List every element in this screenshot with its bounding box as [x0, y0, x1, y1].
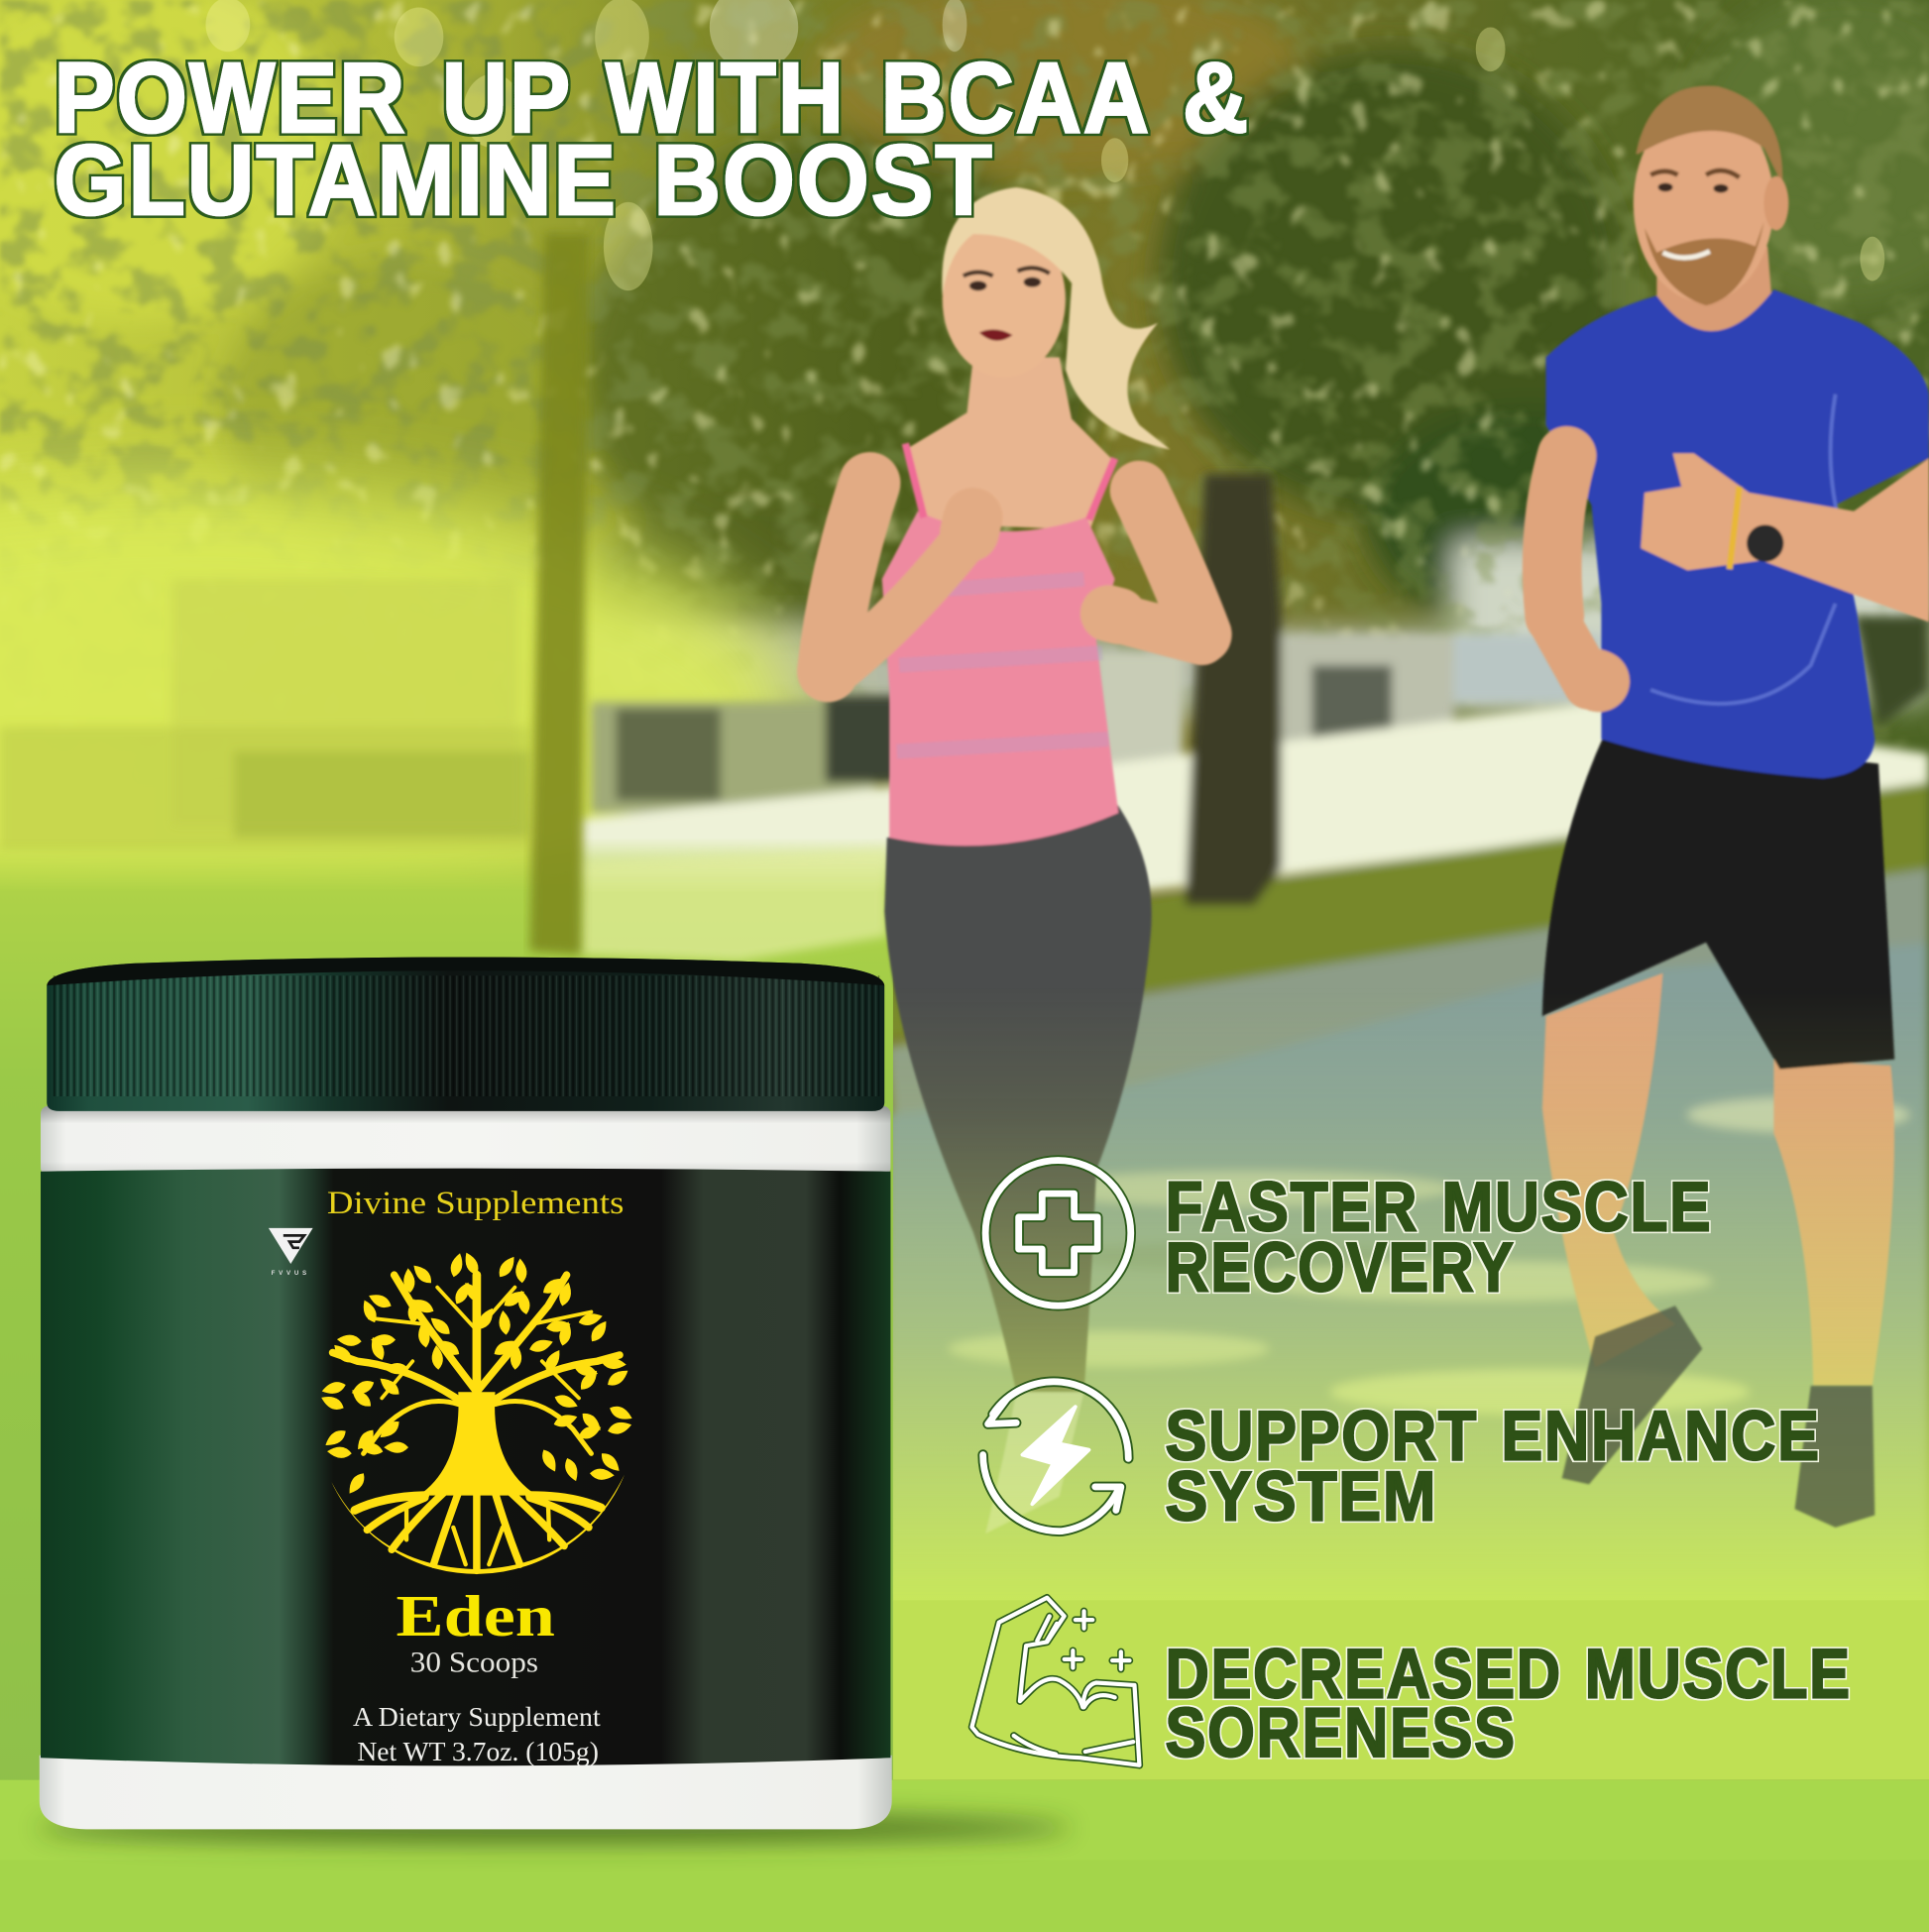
jar lower white rim	[40, 1756, 892, 1829]
title: POWER UP WITH BCAA &	[55, 43, 1250, 154]
neck and chest	[905, 357, 1115, 529]
man left arm	[1552, 456, 1599, 684]
benefit: decreased muscle soreness	[1166, 1635, 1852, 1772]
left tree trunk	[529, 234, 589, 955]
benefit: faster muscle recovery: RECOVERY	[1166, 1228, 1515, 1307]
man runner	[1542, 86, 1929, 1386]
benefit: faster muscle recovery	[1166, 1168, 1712, 1307]
icon: flexed muscle arm	[971, 1598, 1139, 1765]
man shorts	[1542, 733, 1894, 1070]
woman arms	[828, 483, 1202, 677]
woman head	[943, 222, 1066, 377]
benefit: support enhance system: SUPPORT ENHANCE	[1166, 1398, 1821, 1476]
pink tank top	[882, 511, 1118, 846]
jar upper white band	[41, 1106, 890, 1176]
brand name: Divine Supplements	[327, 1185, 624, 1220]
man head	[1634, 105, 1773, 301]
neck	[1656, 247, 1773, 370]
product name: Eden	[397, 1583, 555, 1648]
benefit: decreased muscle soreness: SORENESS	[1166, 1694, 1517, 1772]
man legs	[1542, 973, 1675, 1367]
pale road fading into grass	[579, 850, 887, 961]
title: GLUTAMINE BOOST	[55, 125, 994, 236]
running shoes	[985, 1306, 1874, 1534]
trunk	[419, 1392, 537, 1496]
leggings	[884, 801, 1152, 1392]
tree of life emblem	[319, 1250, 634, 1574]
benefit: support enhance system	[1166, 1398, 1821, 1535]
icon: energy cycle bolt	[983, 1382, 1128, 1532]
logo mark	[269, 1228, 313, 1277]
jar label	[41, 1169, 890, 1766]
logo mark: FVVUS	[272, 1270, 310, 1277]
jar lid	[47, 958, 884, 1111]
woman runner	[828, 187, 1202, 1392]
green gradient overlay	[0, 985, 1929, 1932]
branches	[333, 1275, 620, 1453]
jar shadow	[37, 1812, 1072, 1844]
net weight: Net WT 3.7oz. (105g)	[357, 1737, 599, 1766]
blue shirt	[1546, 289, 1929, 778]
sunlight bokeh	[206, 0, 1884, 290]
roots crescent	[331, 1474, 624, 1574]
root strokes	[355, 1493, 601, 1570]
benefit: faster muscle recovery: FASTER MUSCLE	[1166, 1168, 1712, 1246]
right forearm and hand	[1641, 453, 1929, 623]
foliage texture	[0, 0, 1929, 788]
title	[55, 43, 1250, 236]
supplement line: A Dietary Supplement	[353, 1702, 601, 1732]
pale haze over the lower left of the photo	[0, 481, 801, 949]
leaves	[319, 1250, 634, 1497]
benefit: support enhance system: SYSTEM	[1166, 1457, 1437, 1535]
product jar	[40, 958, 892, 1829]
icon: medical plus in circle	[985, 1161, 1131, 1306]
scoops count: 30 Scoops	[410, 1646, 538, 1678]
